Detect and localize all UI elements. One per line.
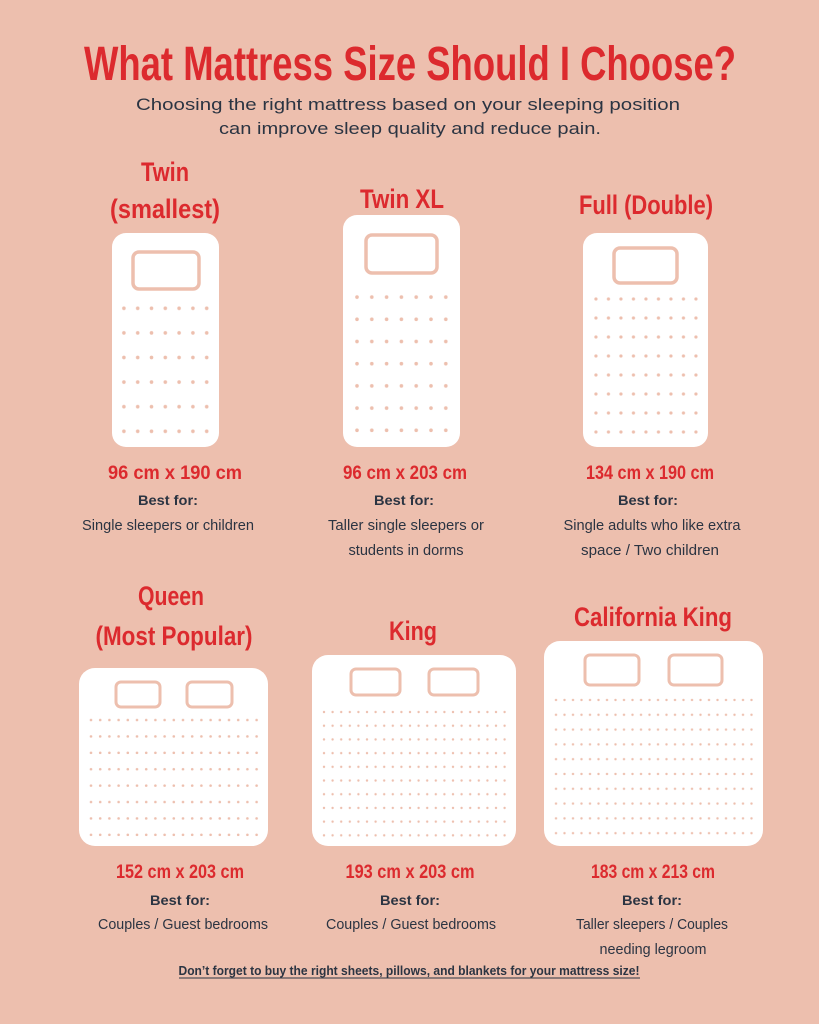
- panel: full: Full (Double): [579, 190, 713, 220]
- icon: king mattress: [312, 655, 516, 846]
- panel: twin xl: Taller single sleepers or: [328, 517, 484, 534]
- panel: twin xl: Best for:: [374, 492, 434, 508]
- panel: king: Best for:: [380, 892, 440, 908]
- subtitle: [136, 95, 680, 138]
- panel: california king: Best for:: [622, 892, 682, 908]
- panel: california king: 183 cm x 213 cm: [591, 862, 715, 883]
- panel: queen: Best for:: [150, 892, 210, 908]
- panel: twin: 96 cm x 190 cm: [108, 463, 242, 484]
- panel: full: space / Two children: [581, 542, 719, 559]
- panel: queen: Couples / Guest bedrooms: [98, 916, 268, 933]
- panel: twin: Single sleepers or children: [82, 517, 254, 534]
- panel: twin xl: [328, 184, 484, 559]
- panel: full: 134 cm x 190 cm: [586, 463, 714, 484]
- panel: california king: [544, 602, 763, 958]
- panel: twin: (smallest): [110, 194, 220, 224]
- panel: california king: needing legroom: [600, 941, 706, 958]
- panel: queen: 152 cm x 203 cm: [116, 862, 244, 883]
- panel: queen: Queen: [138, 581, 204, 611]
- panel: king: [312, 616, 516, 933]
- panel: twin xl: students in dorms: [348, 542, 464, 559]
- panel: twin xl: 96 cm x 203 cm: [343, 463, 467, 484]
- panel: queen: (Most Popular): [96, 621, 252, 651]
- panel: california king: Taller sleepers / Couples: [576, 916, 728, 933]
- icon: full mattress: [583, 233, 708, 447]
- subtitle: Choosing the right mattress based on your sleeping position: [136, 95, 680, 114]
- panel: king: Couples / Guest bedrooms: [326, 916, 496, 933]
- panel: twin: Twin: [141, 157, 189, 187]
- panel: full: Single adults who like extra: [564, 517, 741, 534]
- panel: twin: [82, 157, 254, 534]
- panel: twin: Best for:: [138, 492, 198, 508]
- panel: full: Best for:: [618, 492, 678, 508]
- icon: queen mattress: [79, 668, 268, 846]
- panel: king: 193 cm x 203 cm: [346, 862, 474, 883]
- icon: twin xl mattress: [343, 215, 460, 447]
- panel: twin xl: Twin XL: [360, 184, 444, 214]
- icon: twin mattress: [112, 233, 219, 447]
- icon: california king mattress: [544, 641, 763, 846]
- subtitle: can improve sleep quality and reduce pain.: [219, 119, 601, 138]
- footer note: Don’t forget to buy the right sheets, pillows, and blankets for your mattress size!: [178, 963, 640, 978]
- panel: california king: California King: [574, 602, 732, 632]
- panel: full: [564, 190, 741, 559]
- panel: king: King: [389, 616, 437, 646]
- panel: queen: [79, 581, 268, 933]
